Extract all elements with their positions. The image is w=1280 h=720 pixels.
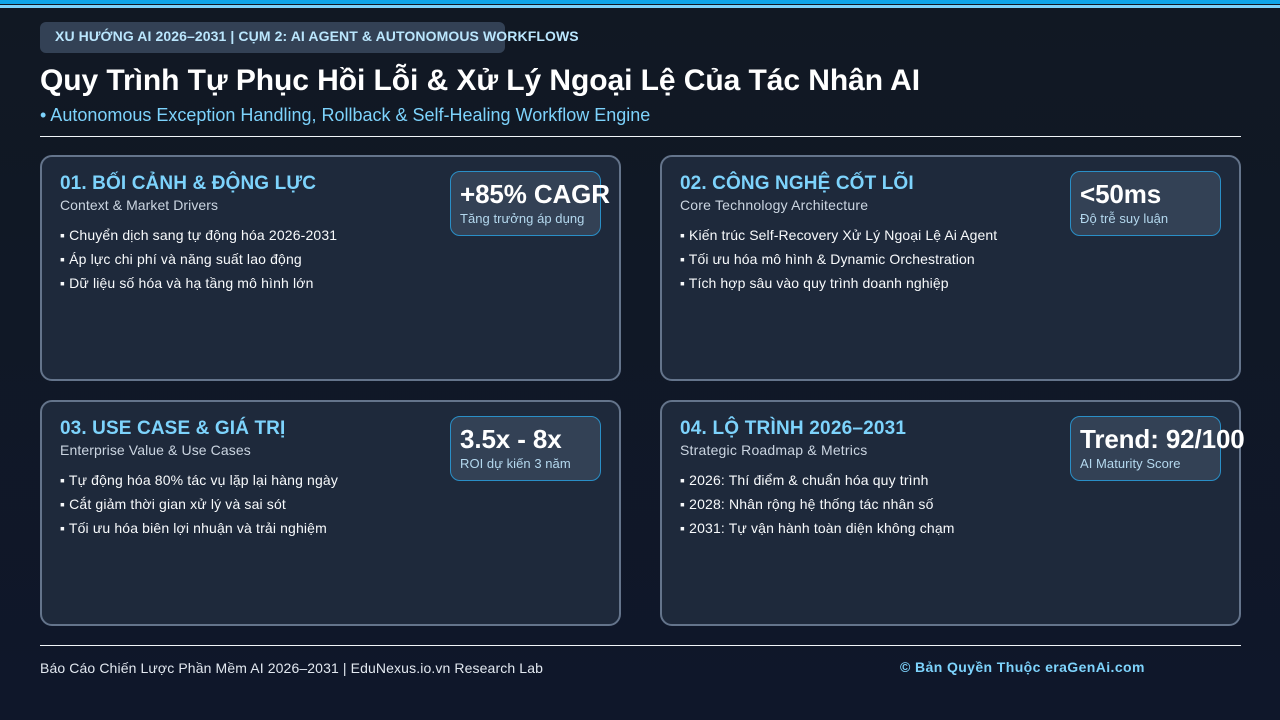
category tag: XU HƯỚNG AI 2026–2031 | CỤM 2: AI AGENT & AUTONOMOUS WORKFLOWS <box>55 28 579 44</box>
bullet list: 02: ▪ Tích hợp sâu vào quy trình doanh nghiệp <box>680 275 949 291</box>
heading: 02: 02. CÔNG NGHỆ CỐT LÕI <box>680 173 914 194</box>
metric: latency <box>1070 171 1221 236</box>
title: Quy Trình Tự Phục Hồi Lỗi & Xử Lý Ngoại Lệ Của Tác Nhân AI <box>40 64 920 97</box>
metric: ROI: 3.5x - 8x <box>460 424 562 454</box>
bullet list: 04: ▪ 2031: Tự vận hành toàn diện không chạm <box>680 520 955 536</box>
footer copyright: © Bản Quyền Thuộc eraGenAi.com <box>900 659 1145 675</box>
bullet list: 04 <box>680 472 955 536</box>
panel: 01 context <box>40 155 621 381</box>
metric: trend score: Trend: 92/100 <box>1080 424 1245 454</box>
bullet list: 02: ▪ Tối ưu hóa mô hình & Dynamic Orchestration <box>680 251 975 267</box>
bullet list: 01: ▪ Chuyển dịch sang tự động hóa 2026-2031 <box>60 227 337 243</box>
heading: 01: 01. BỐI CẢNH & ĐỘNG LỰC <box>60 173 316 194</box>
heading: 04: 04. LỘ TRÌNH 2026–2031 <box>680 418 906 439</box>
metric: trend score: AI Maturity Score <box>1080 456 1181 471</box>
subheading: 04: Strategic Roadmap & Metrics <box>680 442 867 458</box>
metric: CAGR <box>450 171 601 236</box>
bullet list: 01: ▪ Áp lực chi phí và năng suất lao động <box>60 251 302 267</box>
panel: 03 use case <box>40 400 621 626</box>
top accent bar <box>0 0 1280 8</box>
metric: ROI: ROI dự kiến 3 năm <box>460 456 571 471</box>
metric: CAGR: Tăng trưởng áp dụng <box>460 211 584 226</box>
panel: 04 roadmap <box>660 400 1241 626</box>
footer source: Báo Cáo Chiến Lược Phần Mềm AI 2026–2031 | EduNexus.io.vn Research Lab <box>40 660 543 676</box>
bullet list: 04: ▪ 2026: Thí điểm & chuẩn hóa quy trình <box>680 472 929 488</box>
category tag <box>40 22 505 53</box>
metric: latency: <50ms <box>1080 179 1161 209</box>
subheading: 01: Context & Market Drivers <box>60 197 218 213</box>
bullet list: 01: ▪ Dữ liệu số hóa và hạ tầng mô hình lớn <box>60 275 314 291</box>
metric: ROI <box>450 416 601 481</box>
metric: latency: Độ trễ suy luận <box>1080 211 1168 226</box>
subheading: 02: Core Technology Architecture <box>680 197 868 213</box>
bullet list: 03 <box>60 472 338 536</box>
panel: 02 technology <box>660 155 1241 381</box>
heading: 03: 03. USE CASE & GIÁ TRỊ <box>60 418 285 439</box>
metric: trend score <box>1070 416 1221 481</box>
bullet list: 03: ▪ Cắt giảm thời gian xử lý và sai sót <box>60 496 286 512</box>
bullet list: 02: ▪ Kiến trúc Self-Recovery Xử Lý Ngoại Lệ Ai Agent <box>680 227 997 243</box>
bullet list: 03: ▪ Tối ưu hóa biên lợi nhuận và trải nghiệm <box>60 520 327 536</box>
bullet list: 01 <box>60 227 337 291</box>
subtitle: • Autonomous Exception Handling, Rollback & Self-Healing Workflow Engine <box>40 105 650 125</box>
bullet list: 03: ▪ Tự động hóa 80% tác vụ lặp lại hàng ngày <box>60 472 338 488</box>
subheading: 03: Enterprise Value & Use Cases <box>60 442 251 458</box>
bullet list: 02 <box>680 227 998 291</box>
metric: CAGR: +85% CAGR <box>460 179 610 209</box>
bullet list: 04: ▪ 2028: Nhân rộng hệ thống tác nhân số <box>680 496 934 512</box>
